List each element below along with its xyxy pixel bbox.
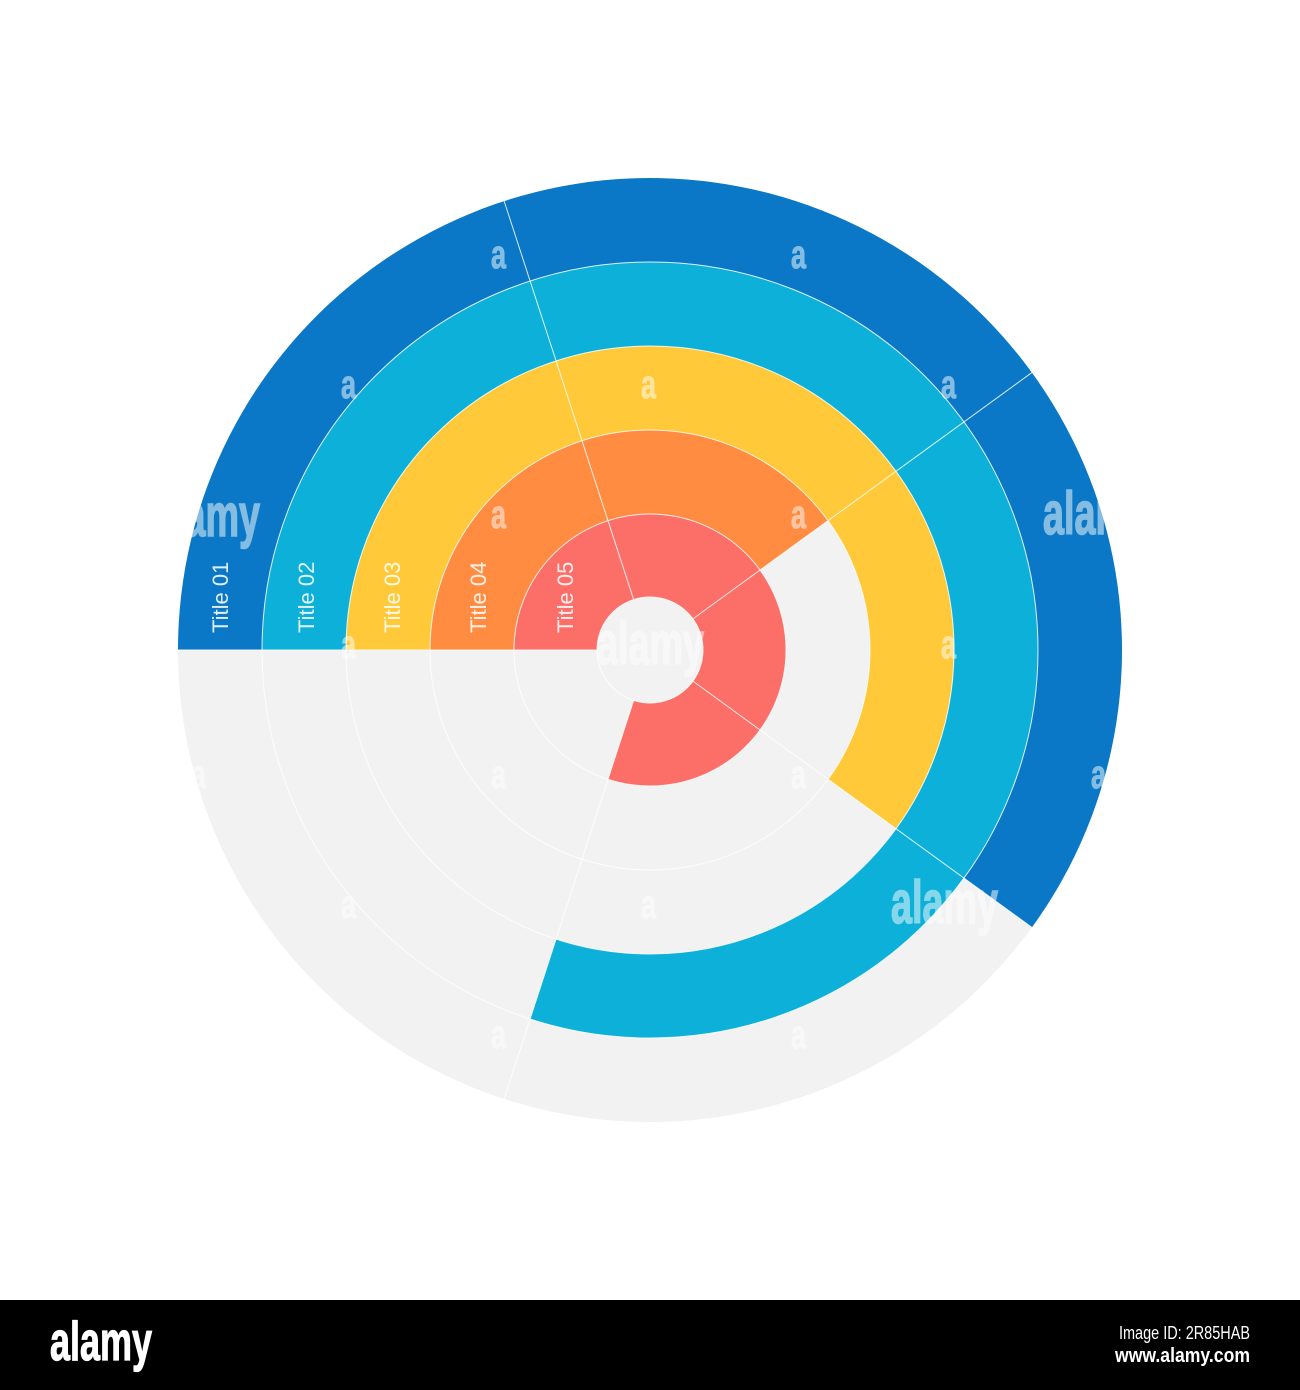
small watermark letters: a — [791, 493, 807, 537]
ring titles — [208, 562, 578, 633]
ring 5: red — [514, 514, 786, 786]
ring 4: orange — [430, 430, 828, 650]
small watermark letters: a — [491, 233, 507, 277]
title 04: Title 04 — [466, 562, 491, 633]
small watermark letters: a — [341, 883, 357, 927]
small watermark letters: a — [941, 363, 957, 407]
small watermark letters: a — [791, 753, 807, 797]
small watermark letters: a — [491, 1013, 507, 1057]
large watermark wordmarks: alamy — [153, 482, 260, 549]
small watermark letters: a — [341, 623, 357, 667]
watermark — [153, 233, 1150, 1057]
website: www.alamy.com — [1114, 1345, 1250, 1367]
small watermark letters: a — [791, 233, 807, 277]
small watermark letters: a — [791, 1013, 807, 1057]
small watermark letters: a — [191, 753, 207, 797]
title 03: Title 03 — [380, 562, 405, 633]
small watermark letters: a — [491, 493, 507, 537]
footer background — [0, 1300, 1300, 1390]
background disc — [178, 178, 1122, 1122]
footer logo: alamy — [50, 1310, 152, 1372]
small watermark letters: a — [641, 363, 657, 407]
title 02: Title 02 — [294, 562, 319, 633]
title 01: Title 01 — [208, 562, 233, 633]
footer bar — [0, 1300, 1300, 1390]
title 05: Title 05 — [553, 562, 578, 633]
large watermark wordmarks: alamy — [597, 610, 704, 677]
small watermark letters: a — [341, 363, 357, 407]
image id: Image ID: 2R85HAB — [1119, 1323, 1250, 1343]
grid lines — [178, 201, 1038, 1099]
small watermark letters: a — [641, 883, 657, 927]
ring 2: teal — [262, 262, 1038, 1038]
large watermark wordmarks: alamy — [891, 869, 998, 936]
large watermark wordmarks: alamy — [1043, 480, 1150, 547]
small watermark letters: a — [1091, 753, 1107, 797]
ring 3: yellow — [346, 346, 954, 829]
small watermark letters: a — [491, 753, 507, 797]
small watermark letters — [191, 233, 1107, 1057]
large watermark wordmarks — [153, 480, 1150, 936]
small watermark letters: a — [941, 623, 957, 667]
ring 1: dark blue — [178, 178, 1122, 927]
radial chart — [178, 178, 1122, 1122]
